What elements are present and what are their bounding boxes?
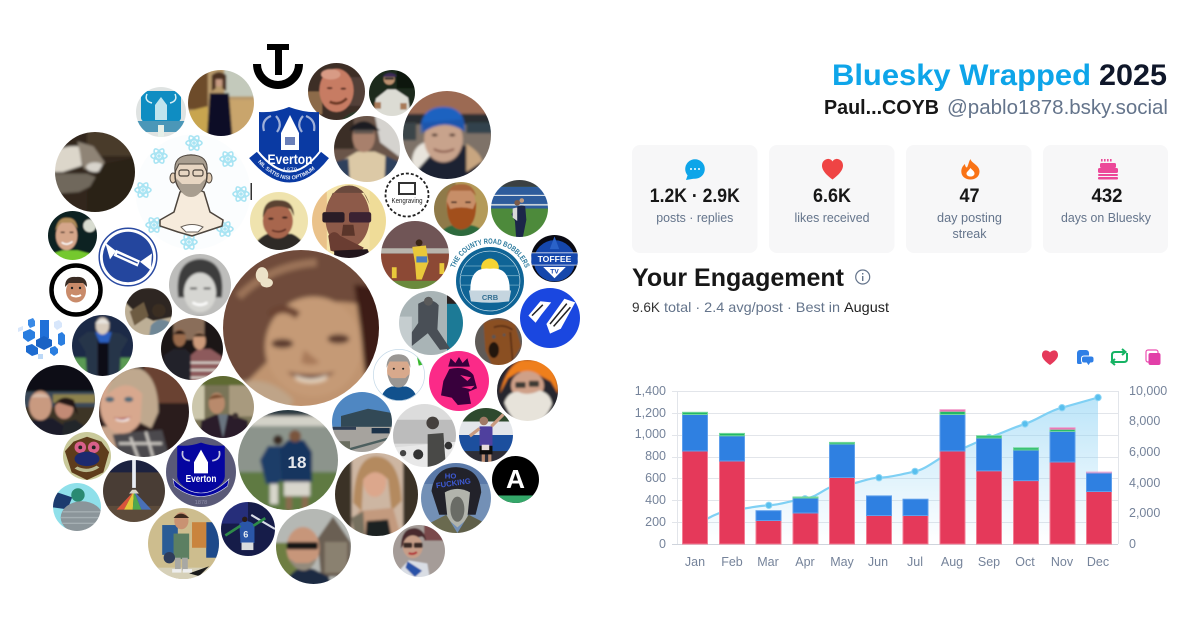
avatar: blonde woman bbox=[99, 367, 189, 457]
text: engagement summary: August bbox=[844, 299, 889, 315]
right axis labels bbox=[1129, 384, 1167, 551]
icon: legend quotes bbox=[1146, 350, 1160, 365]
text: engagement summary: total · 2.4 avg/post · Best in bbox=[664, 299, 840, 315]
panel: posts and replies stat bbox=[632, 145, 758, 253]
avatar: stadium couple bbox=[491, 180, 548, 237]
left axis labels: 200 bbox=[645, 515, 666, 529]
header: title: Bluesky Wrapped bbox=[832, 59, 1091, 92]
avatar: woman with glasses bbox=[393, 525, 445, 577]
panel: days on Bluesky stat: days on Bluesky bbox=[1061, 210, 1151, 225]
panel: days on Bluesky stat bbox=[1043, 145, 1168, 253]
left axis labels: 1,200 bbox=[635, 406, 666, 420]
avatar: ginger beard man bbox=[434, 182, 488, 236]
avatar: couple at night bbox=[25, 365, 95, 435]
avatar: light blue crest bbox=[136, 87, 186, 137]
avatar: toffee tv: TV bbox=[550, 269, 559, 276]
avatar: bobble hat bbox=[53, 483, 101, 531]
avatar: toffee tv bbox=[531, 235, 578, 282]
avatar: dog bbox=[475, 318, 522, 365]
avatar: emoji in black ring bbox=[52, 266, 100, 314]
month labels bbox=[685, 555, 1109, 569]
icon: info bbox=[856, 270, 870, 284]
icon: flame bbox=[961, 159, 980, 180]
icon: legend reposts bbox=[1112, 349, 1127, 365]
avatar: meditating figure bbox=[135, 134, 252, 251]
avatar: memoji man bbox=[373, 349, 425, 401]
crest motto: NIL SATIS NISI OPTIMUM bbox=[258, 160, 315, 180]
avatar: county road bobblers: CRB bbox=[482, 293, 499, 302]
avatar: monster cartoon bbox=[63, 432, 111, 480]
avatar: man in white cardigan bbox=[369, 70, 415, 116]
left axis labels: 1,400 bbox=[635, 384, 666, 398]
avatar: blue cubes bbox=[18, 315, 66, 359]
month labels: Jul bbox=[907, 555, 923, 569]
avatar: toffee blue badge bbox=[98, 228, 158, 286]
avatar: runner bbox=[459, 408, 513, 462]
month labels: Oct bbox=[1015, 555, 1035, 569]
avatar: kengraving badge bbox=[386, 174, 428, 216]
right axis labels: 10,000 bbox=[1129, 384, 1167, 398]
ring text: THE COUNTY ROAD BOBBLERS bbox=[450, 238, 530, 268]
avatar: two men bbox=[161, 318, 223, 380]
panel: days on Bluesky stat: 432 bbox=[1092, 186, 1122, 207]
right axis labels: 0 bbox=[1129, 537, 1136, 551]
month labels: May bbox=[830, 555, 855, 569]
avatar: dark small portrait bbox=[125, 288, 172, 335]
avatar: woman in black dress bbox=[188, 70, 254, 136]
heading: your engagement: Your Engagement bbox=[632, 264, 845, 292]
panel: posts and replies stat: posts · replies bbox=[656, 210, 734, 225]
avatar: footballer mural bbox=[399, 291, 463, 355]
stacked bars bbox=[682, 410, 1112, 544]
month labels: Nov bbox=[1051, 555, 1074, 569]
header: user name and handle bbox=[824, 97, 1168, 119]
avatar: man in sunglasses bbox=[276, 509, 351, 584]
badge text: Kengraving bbox=[392, 198, 423, 205]
avatar: caricature bbox=[148, 508, 219, 579]
icon: legend heart bbox=[1042, 350, 1058, 365]
crest lettering: Everton bbox=[186, 474, 216, 485]
panel: likes stat: likes received bbox=[794, 210, 870, 225]
right axis labels: 6,000 bbox=[1129, 445, 1160, 459]
helmet scrawl: HO bbox=[445, 471, 456, 480]
panel: posts and replies stat: 1.2K · 2.9K bbox=[650, 186, 740, 207]
month labels: Aug bbox=[941, 555, 963, 569]
left axis labels: 1,000 bbox=[635, 427, 666, 441]
shirt number: 18 bbox=[288, 453, 306, 472]
shirt number: 6 bbox=[243, 530, 248, 540]
avatar: man in blue beanie bbox=[403, 91, 491, 179]
logo letter: A bbox=[506, 464, 525, 494]
avatar: blonde in dark frame bbox=[335, 453, 418, 536]
avatar: big baby portrait bbox=[223, 250, 379, 406]
avatar: football match number 18 bbox=[238, 410, 338, 510]
avatar: goalkeeper bbox=[48, 211, 97, 260]
right axis labels: 4,000 bbox=[1129, 476, 1160, 490]
icon: cake bbox=[1098, 159, 1118, 180]
month labels: Jun bbox=[868, 555, 888, 569]
header: user name and handle: @pablo1878.bsky.social bbox=[947, 97, 1168, 119]
text: engagement summary: 9.6K bbox=[632, 299, 661, 315]
avatar: man in cap bbox=[334, 116, 400, 182]
avatar: everton crest on grey: 1878 bbox=[195, 500, 207, 506]
panel: likes stat: 6.6K bbox=[813, 186, 851, 207]
avatar: stadium building bbox=[332, 392, 392, 452]
legend: engagement types bbox=[1042, 349, 1160, 366]
avatar: santa beard man bbox=[497, 360, 558, 421]
crest lettering: Everton bbox=[268, 151, 312, 167]
month labels: Mar bbox=[757, 555, 779, 569]
header: title: 2025 bbox=[1099, 59, 1167, 92]
text: engagement summary bbox=[632, 299, 889, 315]
avatar: county road bobblers bbox=[450, 238, 530, 315]
right axis labels: 8,000 bbox=[1129, 414, 1160, 428]
avatar: pele illustration bbox=[381, 221, 449, 289]
avatar: glasses man on yellow bbox=[312, 184, 386, 258]
icon: heart bbox=[822, 159, 843, 180]
avatar: prism bbox=[103, 460, 165, 522]
avatar: black and white man at stand bbox=[393, 404, 456, 467]
left axis labels: 600 bbox=[645, 471, 666, 485]
icon: legend replies bbox=[1077, 350, 1094, 366]
avatar: A logo bbox=[492, 456, 539, 503]
left axis labels: 0 bbox=[659, 537, 666, 551]
avatar: suit man on pitch bbox=[72, 315, 133, 376]
panel: posting streak stat: day posting bbox=[937, 210, 1002, 225]
month labels: Apr bbox=[795, 555, 815, 569]
avatar: bald man bbox=[308, 63, 365, 120]
cumulative line bbox=[695, 398, 1098, 526]
left axis labels: 400 bbox=[645, 493, 666, 507]
month labels: Dec bbox=[1087, 555, 1109, 569]
avatar: black and white footballer bbox=[169, 254, 231, 316]
panel: posting streak stat bbox=[906, 145, 1032, 253]
month labels: Jan bbox=[685, 555, 705, 569]
avatar: fighter pilot helmet: FUCKING bbox=[435, 476, 471, 490]
avatar: fighter pilot helmet bbox=[421, 463, 491, 533]
month labels: Sep bbox=[978, 555, 1000, 569]
left axis labels bbox=[635, 384, 666, 551]
avatar: everton crest on grey bbox=[166, 437, 236, 507]
avatar: blue boots badge bbox=[520, 288, 580, 348]
avatar: man in dark blazer bbox=[192, 376, 254, 438]
month labels: Feb bbox=[721, 555, 743, 569]
avatar: everton crest large bbox=[249, 107, 329, 182]
icon: chat bubble bbox=[685, 159, 705, 180]
header: user name and handle: Paul...COYB bbox=[824, 97, 939, 119]
left axis labels: 800 bbox=[645, 449, 666, 463]
panel: likes stat bbox=[769, 145, 894, 253]
chart: monthly engagement bars with cumulative line bbox=[635, 384, 1167, 569]
badge text: TOFFEE bbox=[538, 255, 572, 264]
right axis labels: 2,000 bbox=[1129, 506, 1160, 520]
cumulative area bbox=[695, 398, 1098, 544]
panel: posting streak stat: streak bbox=[952, 226, 987, 241]
avatar: man on tan background bbox=[250, 192, 308, 250]
panel: posting streak stat: 47 bbox=[960, 186, 980, 207]
logo: T anchor bbox=[257, 44, 299, 85]
avatar: player number 6 bbox=[221, 502, 275, 556]
avatar: everton crest large: 1878 bbox=[283, 167, 298, 174]
avatar: cat bbox=[55, 132, 135, 212]
avatar: premier league lion bbox=[429, 351, 489, 411]
